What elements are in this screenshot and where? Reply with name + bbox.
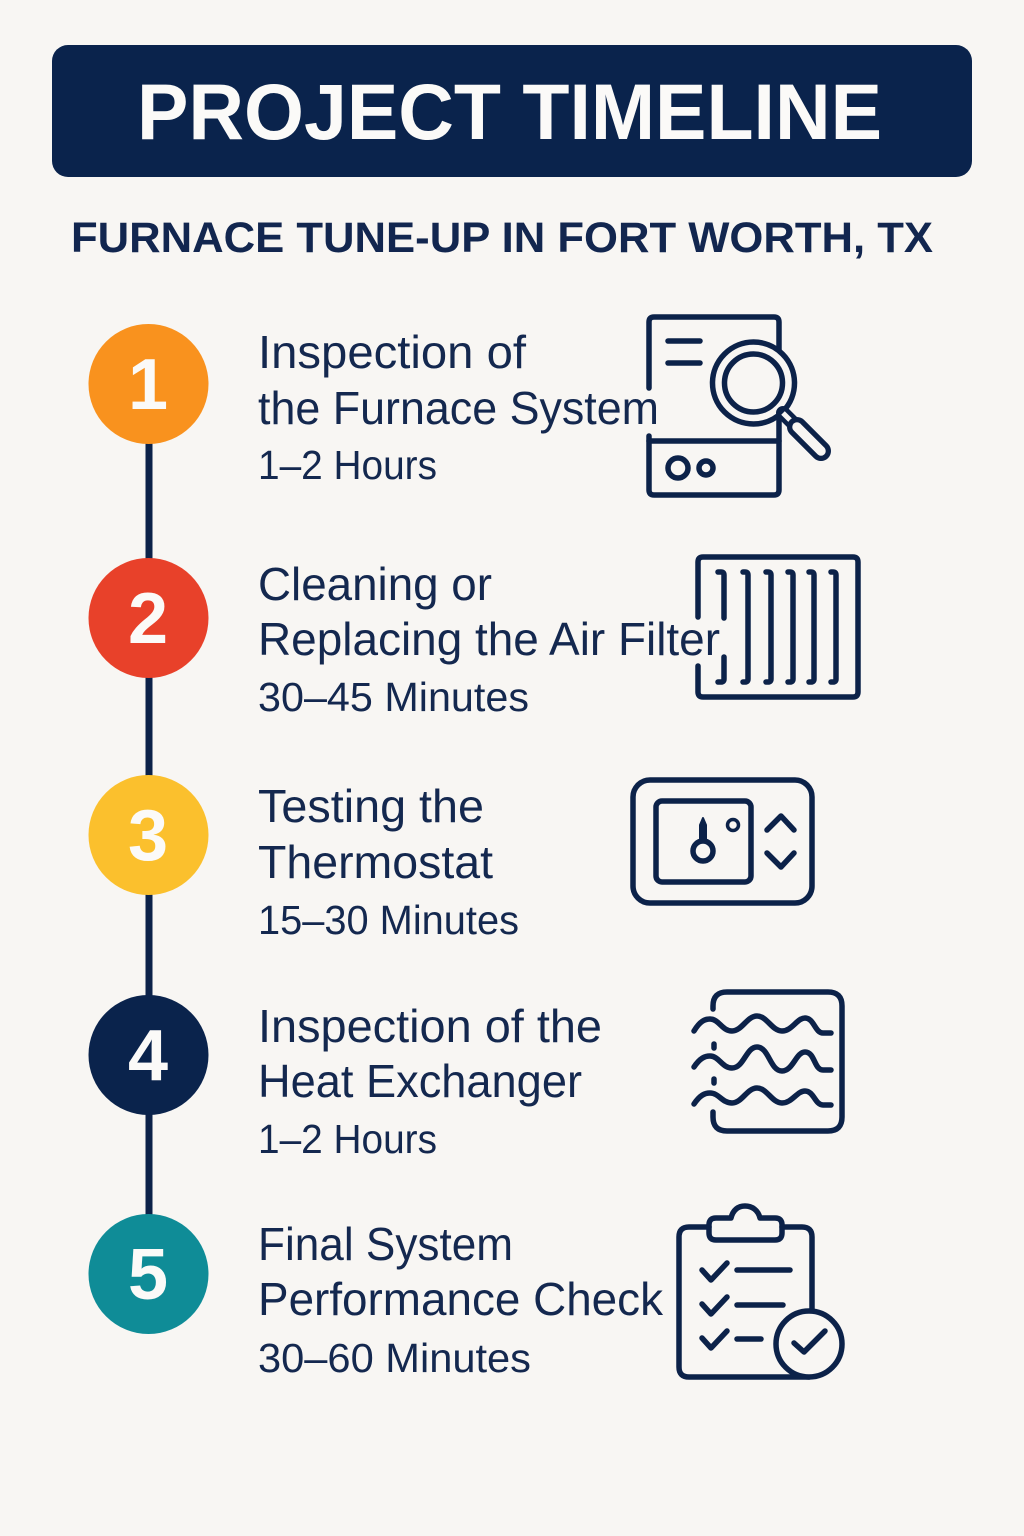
icon: furnace with magnifying glass	[649, 317, 821, 495]
step 2 text: Replacing the Air Filter	[258, 613, 720, 665]
icon: thermostat	[633, 780, 812, 903]
step 2 badge	[88, 558, 208, 678]
step 1 text: Inspection of	[258, 326, 526, 378]
icon: heat exchanger	[694, 992, 842, 1131]
step 2	[88, 557, 858, 720]
step 4 text: 1–2 Hours	[258, 1116, 437, 1162]
step 5 text: Performance Check	[258, 1273, 664, 1325]
step 4 badge	[88, 995, 208, 1115]
step 1 text	[258, 326, 659, 488]
step 5 text: Final System	[258, 1218, 513, 1270]
step 3 text: Thermostat	[258, 836, 493, 888]
timeline connector	[146, 430, 152, 1230]
step 1 text: 1–2 Hours	[258, 442, 437, 488]
step 1 text: the Furnace System	[258, 382, 659, 434]
step 5 text	[258, 1218, 664, 1381]
step 2 text: 30–45 Minutes	[258, 674, 529, 720]
icon: air filter	[698, 557, 858, 697]
step 1 badge	[88, 324, 208, 444]
step 2 badge: 2	[128, 579, 168, 659]
step 3 text: 15–30 Minutes	[258, 897, 519, 943]
title banner: PROJECT TIMELINE	[137, 67, 882, 156]
step 3	[88, 775, 812, 943]
step 1 badge: 1	[128, 345, 168, 425]
step 4 badge: 4	[128, 1016, 168, 1096]
step 2 text	[258, 558, 720, 720]
subtitle: FURNACE TUNE-UP IN FORT WORTH, TX	[71, 214, 933, 262]
step 4 text: Inspection of the	[258, 1000, 602, 1052]
step 3 text: Testing the	[258, 780, 484, 832]
step 5 text: 30–60 Minutes	[258, 1335, 531, 1381]
step 5	[88, 1206, 842, 1381]
step 4 text	[258, 1000, 602, 1162]
step 2 text: Cleaning or	[258, 558, 492, 610]
step 3 badge	[88, 775, 208, 895]
title banner	[52, 45, 972, 177]
step 4 text: Heat Exchanger	[258, 1055, 582, 1107]
step 5 badge: 5	[128, 1235, 168, 1315]
step 3 text	[258, 780, 519, 943]
icon: clipboard checklist	[679, 1206, 842, 1377]
step 1	[88, 317, 821, 495]
step 5 badge	[88, 1214, 208, 1334]
step 4	[88, 992, 842, 1162]
step 3 badge: 3	[128, 796, 168, 876]
